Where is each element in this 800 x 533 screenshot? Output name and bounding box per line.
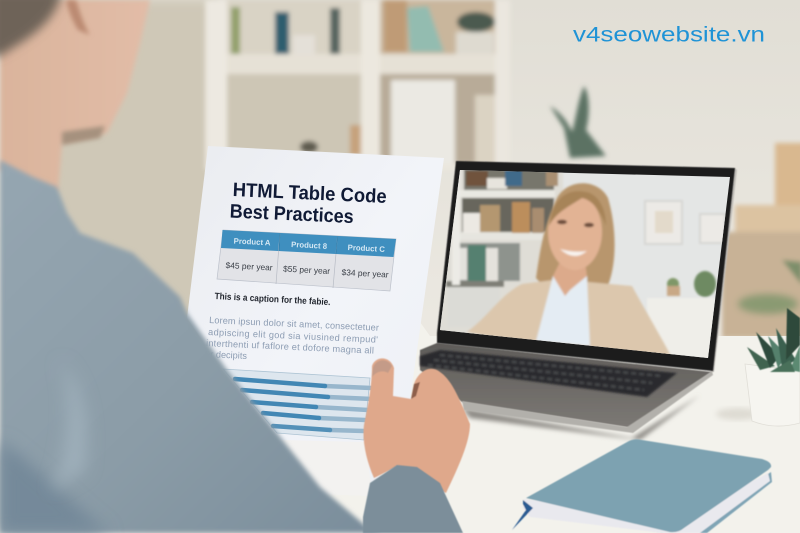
mini bar chart on paper bbox=[223, 369, 372, 440]
laptop lid silver edge bbox=[711, 168, 737, 372]
paper title: HTML Table Code bbox=[232, 179, 387, 208]
on-screen bookshelf bbox=[438, 165, 563, 337]
shadow between fingers bbox=[411, 382, 420, 399]
person: grey-blue shirt, blurred foreground bbox=[0, 160, 463, 533]
background: blurred potted plant bbox=[550, 86, 606, 158]
laptop lid bezel bbox=[437, 161, 735, 371]
back cover bbox=[529, 472, 772, 533]
on-screen wall art and cabinet bbox=[645, 201, 725, 360]
chart background bbox=[223, 369, 370, 440]
hair bbox=[0, 0, 62, 56]
jaw shadow bbox=[62, 126, 105, 145]
holding hand bbox=[363, 358, 470, 493]
pot shadow bbox=[716, 408, 760, 420]
desk surface bbox=[300, 322, 800, 533]
lorem ipsum paragraph: or decipits bbox=[205, 349, 248, 361]
laptop screen: video call bbox=[440, 170, 730, 358]
table caption: This is a caption for the fabie. bbox=[214, 291, 331, 307]
paper document bbox=[187, 146, 444, 496]
succulent leaves bbox=[747, 308, 800, 372]
background: wooden furniture on right bbox=[722, 143, 800, 338]
table header labels: Product A bbox=[233, 237, 271, 247]
table cell values: $45 per year bbox=[225, 260, 273, 272]
on-screen woman bbox=[467, 183, 672, 358]
paper table bbox=[217, 230, 396, 291]
person: head and neck, blurred foreground bbox=[0, 0, 150, 192]
plant in white pot bbox=[716, 308, 800, 426]
pages bbox=[523, 473, 770, 533]
lorem ipsum paragraph bbox=[205, 315, 379, 361]
table header labels: Product C bbox=[347, 243, 385, 254]
table header labels bbox=[233, 237, 385, 254]
table header labels: Product 8 bbox=[291, 240, 328, 251]
paper title: Best Practices bbox=[229, 201, 354, 228]
lorem ipsum paragraph: interthenti uf faflore et dofore magna all bbox=[206, 338, 374, 356]
notebook bbox=[512, 439, 772, 533]
shirt sleeve cuff bbox=[363, 465, 463, 533]
laptop base and keyboard deck bbox=[420, 343, 712, 428]
ribbon bookmark bbox=[512, 500, 533, 530]
cover bbox=[526, 439, 771, 532]
thumbnail bbox=[372, 360, 392, 377]
laptop shadow on desk bbox=[462, 395, 700, 440]
paper title bbox=[229, 179, 387, 228]
website watermark: v4seowebsite.vn bbox=[573, 22, 765, 46]
paper sheet bbox=[187, 146, 444, 496]
shirt folds bbox=[0, 440, 110, 533]
background: blurred bookshelf bbox=[205, 0, 510, 170]
lorem ipsum paragraph: adpiscing elit god sia viusined rempud' bbox=[208, 327, 378, 345]
lorem ipsum paragraph: Lorem ipsun dolor sit amet, consectetuer bbox=[209, 315, 379, 333]
table cell values bbox=[225, 260, 389, 279]
laptop bbox=[420, 161, 740, 440]
ear shadow bbox=[66, 0, 90, 35]
keyboard bbox=[420, 350, 677, 397]
pot bbox=[745, 364, 800, 426]
table cell values: $55 per year bbox=[283, 264, 331, 276]
table cell values: $34 per year bbox=[341, 267, 389, 279]
